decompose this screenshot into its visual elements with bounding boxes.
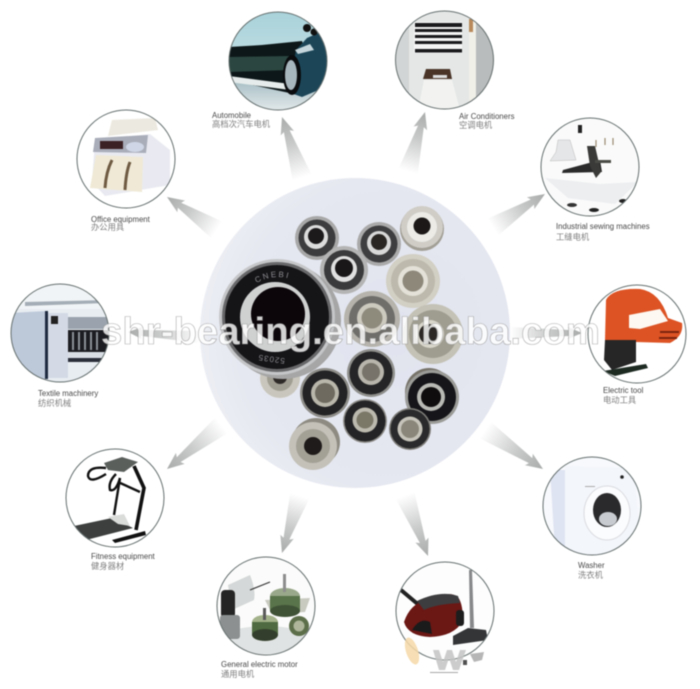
circle: vacuum cleaner: [400, 569, 488, 646]
label: automobile: 高档次汽车电机: [212, 119, 271, 129]
bearing: silver behind large: [260, 358, 300, 398]
arrow: to automobile: [273, 114, 312, 181]
circle outline: electric tool: [588, 285, 686, 383]
bearing: silver right upper: [386, 254, 440, 308]
circle outline: textile machinery: [11, 284, 109, 382]
bottom watermark smudge: [402, 636, 484, 673]
circle outline: air conditioner: [396, 11, 494, 109]
label: office equipment: [91, 215, 151, 232]
label: general electric motor: [221, 660, 298, 679]
circle: washer: [550, 466, 639, 554]
circle: automobile: [229, 12, 328, 110]
label: textile machinery: 纺织机械: [38, 398, 71, 408]
label: fitness equipment: Fitness equipment: [91, 552, 156, 561]
arrow: to textile: [128, 326, 200, 343]
circle outline: office equipment: [77, 110, 175, 208]
bearing: black lower right: [389, 408, 431, 450]
label: air conditioners: [459, 112, 515, 130]
label: textile machinery: [38, 389, 98, 408]
bearing: large CNEBI: 52035: [257, 353, 285, 365]
circle: office equipment: [90, 118, 170, 196]
arrow: to fitness: [161, 417, 228, 477]
bearing: black lower middle: [343, 399, 387, 443]
arrow: to motor: [272, 493, 309, 556]
arrow: to office: [161, 189, 223, 238]
circle outline: washer: [543, 457, 641, 555]
label: general electric motor: 通用电机: [221, 669, 255, 679]
bearing: black centre: [347, 349, 395, 397]
arrow: to electric tool: [510, 327, 582, 339]
circle outline: vacuum cleaner: [396, 562, 494, 660]
label: general electric motor: General electric motor: [221, 660, 298, 669]
bearing: silver right: [403, 304, 463, 364]
circle outline: general electric motor: [217, 557, 315, 655]
central disc with bearings: [200, 178, 510, 488]
arrow: to sewing machines: [487, 186, 550, 236]
label: office equipment: 办公用具: [91, 222, 124, 232]
watermark text: shr-bearing.en.alibaba.com: [101, 311, 600, 353]
circle: air conditioner: [395, 11, 494, 110]
label: automobile: [212, 111, 271, 129]
label: washer: Washer: [578, 561, 605, 570]
label: air conditioners: 空调电机: [459, 120, 493, 130]
bearing: top right: [400, 206, 444, 251]
circle outline: automobile: [229, 12, 327, 110]
label: industrial sewing machines: [556, 222, 650, 242]
label: air conditioners: Air Conditioners: [459, 112, 515, 121]
label: automobile: Automobile: [212, 111, 251, 120]
bearing: black right lower: [405, 368, 459, 424]
label: electric tool: Electric tool: [603, 386, 644, 395]
circle: fitness equipment: [74, 456, 147, 544]
circle outline: fitness equipment: [66, 449, 164, 547]
circle: textile machinery: [11, 284, 109, 383]
bearing: black lower left: [300, 368, 350, 418]
bearing: large CNEBI: [218, 258, 342, 380]
label: fitness equipment: [91, 552, 156, 571]
label: office equipment: Office equipment: [91, 215, 151, 224]
arrow: to washer: [479, 422, 549, 477]
circle: sewing machine: [546, 124, 636, 213]
bearing: top left: [295, 216, 339, 260]
label: textile machinery: Textile machinery: [38, 389, 98, 398]
label: industrial sewing machines: 工缝电机: [556, 232, 590, 242]
circle: electric tool: [603, 288, 683, 377]
label: electric tool: 电动工具: [603, 395, 636, 405]
circle: general electric motor: [219, 573, 310, 654]
arrow: to vacuum: [396, 492, 437, 560]
bearing: large CNEBI: CNEBI: [254, 271, 289, 282]
label: electric tool: [603, 386, 644, 405]
bearing: top middle: [357, 222, 401, 266]
circle outline: sewing machine: [541, 118, 639, 216]
bearing: silver bottom: [289, 418, 340, 470]
bearing: silver centre: [344, 291, 400, 347]
bearing: upper centre: [320, 246, 368, 294]
label: washer: [578, 561, 605, 580]
label: washer: 洗衣机: [578, 570, 604, 580]
label: industrial sewing machines: Industrial sewing machines: [556, 222, 650, 231]
arrow: to air conditioners: [398, 109, 435, 174]
label: fitness equipment: 健身器材: [91, 561, 124, 571]
